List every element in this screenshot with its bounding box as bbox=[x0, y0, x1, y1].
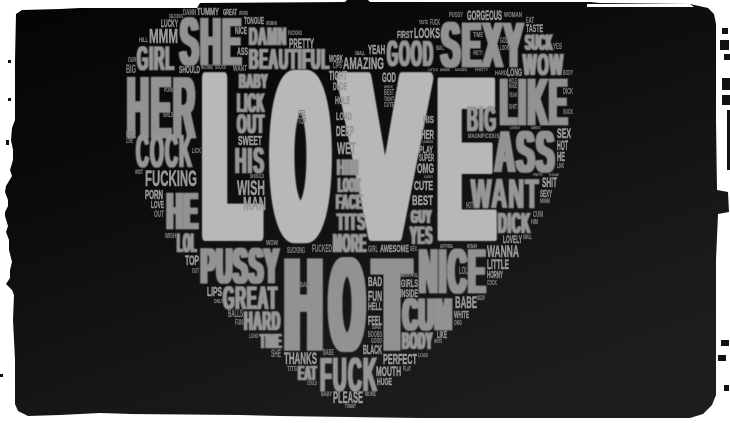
medium words: FUN bbox=[368, 288, 382, 305]
small words: SHIT bbox=[509, 104, 517, 111]
largest words: HE bbox=[167, 183, 199, 241]
largest words: ASS bbox=[495, 120, 556, 185]
small words: WOMAN bbox=[467, 244, 477, 250]
small solid words: TUMMY bbox=[197, 7, 219, 18]
small words: LOAD bbox=[418, 353, 428, 359]
small words: BEAUTIFUL bbox=[400, 273, 418, 279]
small words: DELICIOUS bbox=[169, 14, 183, 20]
word cloud heart: T bbox=[374, 231, 410, 378]
small words: SUCKING bbox=[287, 246, 305, 255]
small words: WOW bbox=[266, 240, 278, 247]
small words: MMM bbox=[540, 199, 550, 205]
small words: LICK bbox=[192, 148, 201, 155]
small solid words: TONGUE bbox=[244, 16, 264, 27]
large words: COCK bbox=[136, 125, 193, 177]
small words: LINK bbox=[557, 163, 564, 170]
small words: FUN bbox=[235, 318, 243, 327]
small solid words: WHITE bbox=[454, 310, 469, 321]
medium words: PRETTY bbox=[289, 35, 314, 51]
large words: LICK bbox=[237, 88, 265, 118]
small solid words: AWESOME bbox=[380, 244, 409, 255]
medium words: DEEP bbox=[336, 123, 354, 140]
small words: HOT bbox=[466, 201, 473, 210]
small words: PRETTY bbox=[533, 172, 543, 177]
small words: COCK bbox=[487, 280, 497, 287]
small words: BOOBS bbox=[368, 330, 382, 339]
largest words bbox=[127, 4, 569, 340]
large words: WANT bbox=[471, 170, 540, 217]
small words: YEAH bbox=[509, 93, 517, 99]
medium words: THANKS bbox=[284, 349, 317, 368]
small words: SUCKED bbox=[455, 67, 467, 72]
small words: GIRL bbox=[368, 244, 378, 254]
small words: TASTE bbox=[419, 20, 428, 26]
large words: HARD bbox=[244, 306, 281, 336]
word cloud heart bbox=[126, 4, 573, 410]
small words: SUCK bbox=[563, 109, 573, 116]
small words: BEST bbox=[384, 88, 394, 97]
large words: BIG bbox=[467, 100, 497, 139]
small words bbox=[126, 8, 573, 410]
small words: HUGE bbox=[509, 84, 517, 90]
medium words: HE bbox=[557, 149, 565, 164]
small solid words: DUDE bbox=[333, 81, 347, 93]
small words: OUT bbox=[192, 268, 199, 275]
small words: WOMAN bbox=[266, 21, 277, 27]
small solid words: TASTE bbox=[526, 23, 543, 35]
small words: LITTLE bbox=[428, 67, 438, 72]
small words: OUT bbox=[154, 209, 164, 219]
small words: MAGNIFICIOUS bbox=[468, 134, 499, 140]
medium words: HER bbox=[421, 127, 434, 142]
large words: BODY bbox=[402, 328, 433, 355]
word cloud heart: E bbox=[438, 31, 494, 287]
large words: HIM bbox=[337, 155, 359, 180]
large words: BEAUTIFUL bbox=[249, 44, 330, 76]
large words: DAMN bbox=[249, 23, 287, 51]
large words: OUT bbox=[237, 109, 265, 139]
medium words: LITTLE bbox=[487, 256, 509, 272]
small words: HARD bbox=[495, 71, 507, 77]
medium words: MAN bbox=[243, 194, 266, 214]
medium words: PLEASE bbox=[333, 388, 363, 407]
small solid words: LOVELY bbox=[503, 234, 522, 246]
small words: HIM bbox=[531, 219, 538, 226]
small words: PRETTY bbox=[473, 51, 483, 57]
largest words: SHE bbox=[180, 4, 243, 80]
small solid words: LOVE bbox=[151, 200, 164, 211]
small words: PLEASE bbox=[549, 172, 559, 177]
small words: SUPER bbox=[372, 325, 381, 331]
small words: WHITE bbox=[384, 84, 393, 89]
small words: FUCKING bbox=[288, 31, 302, 37]
large words: MORE bbox=[333, 228, 367, 258]
small words: DEEP bbox=[477, 296, 485, 302]
small words: PUSSY bbox=[449, 12, 463, 19]
small words: TOP bbox=[298, 116, 306, 126]
small solid words: WORK bbox=[329, 54, 343, 65]
small solid words: GIRLS bbox=[401, 278, 418, 290]
medium words: GOD bbox=[382, 69, 396, 85]
small words: EAT bbox=[526, 16, 534, 25]
small words: BABY bbox=[321, 392, 332, 398]
small words: OMG bbox=[454, 320, 462, 327]
word: LOVE bbox=[201, 30, 494, 287]
medium words: CUTE bbox=[414, 178, 433, 193]
medium words: SHIT bbox=[542, 174, 557, 190]
medium words: LOOKS bbox=[414, 25, 440, 42]
small solid words: SHOULD bbox=[179, 65, 200, 76]
medium words: WANNA bbox=[487, 242, 519, 261]
small words: LOVE bbox=[126, 138, 133, 145]
small words: MORE bbox=[365, 392, 376, 398]
small solid words: HORNY bbox=[487, 270, 503, 281]
small words: HOLE bbox=[509, 78, 517, 85]
word cloud heart: WOW bbox=[523, 47, 564, 82]
word: LOVE: L bbox=[201, 30, 261, 284]
large words: LOL bbox=[177, 228, 197, 258]
text: LIKE bbox=[500, 65, 569, 140]
small words: LUCKY bbox=[424, 174, 433, 179]
small words: SMALL bbox=[355, 51, 365, 57]
large words: HIS bbox=[235, 140, 265, 181]
medium words: GORGEOUS bbox=[467, 7, 502, 23]
small words: HILL bbox=[139, 38, 148, 44]
small words: GOD bbox=[500, 36, 508, 45]
large words: EAT bbox=[298, 363, 317, 385]
small words: LOOKS bbox=[500, 45, 511, 52]
word: LOVE: O bbox=[274, 30, 327, 284]
medium words: BABE bbox=[455, 293, 477, 312]
large words: FACE bbox=[336, 191, 363, 214]
small solid words: HIS bbox=[423, 115, 434, 126]
small words: SHOULD bbox=[250, 174, 264, 180]
small words: MACHINE bbox=[201, 65, 213, 71]
small words: FUCK bbox=[430, 18, 440, 27]
largest words: NICE bbox=[419, 237, 487, 307]
small solid words: NICE bbox=[235, 26, 247, 37]
small words: WISH bbox=[165, 233, 176, 240]
large words: LOOK bbox=[338, 175, 361, 197]
small words: CUM bbox=[533, 210, 543, 219]
large words: SUCK bbox=[525, 30, 553, 55]
medium words: PORN bbox=[145, 187, 163, 202]
small words: PLAY bbox=[403, 366, 411, 373]
small words: BABE bbox=[323, 348, 334, 357]
small words: LONGER bbox=[422, 139, 433, 144]
small solid words: SUPER bbox=[419, 153, 434, 164]
medium words: WET bbox=[337, 139, 356, 158]
small solid words: ASS bbox=[237, 46, 248, 58]
small words: LONG bbox=[249, 334, 258, 340]
small words: LOL bbox=[459, 265, 468, 277]
word: HOT: O bbox=[330, 231, 364, 378]
small words: FACE bbox=[126, 130, 136, 139]
small words: GIRLS bbox=[163, 112, 173, 119]
small solid words: INSIDE bbox=[400, 288, 418, 300]
large words: GOOD bbox=[387, 33, 434, 74]
small words: BALLS bbox=[228, 308, 243, 320]
large words: GREAT bbox=[223, 280, 278, 316]
small words: CUTE bbox=[384, 102, 394, 109]
medium words: SWEET bbox=[238, 133, 262, 148]
small words: SEX bbox=[410, 246, 417, 253]
medium words: MOUTH bbox=[376, 363, 401, 379]
medium words: TIGHT bbox=[329, 68, 347, 83]
medium words: AMAZING bbox=[343, 54, 384, 73]
small words: DRINK bbox=[440, 67, 450, 72]
small solid words: HOLE bbox=[335, 95, 350, 107]
largest words: HER bbox=[127, 58, 197, 157]
small solid words bbox=[151, 7, 552, 388]
small solid words: LUCKY bbox=[161, 18, 178, 30]
large words: TITS bbox=[337, 209, 366, 236]
small words: ANYTHING bbox=[440, 244, 453, 250]
word cloud heart: HOT bbox=[557, 137, 568, 153]
small solid words: PLAY bbox=[419, 145, 433, 156]
small words: TIME bbox=[473, 32, 483, 39]
medium words bbox=[145, 7, 571, 407]
small words: DICK bbox=[563, 87, 573, 96]
medium words: BAD bbox=[368, 274, 382, 289]
small words: SMALL bbox=[523, 235, 532, 241]
word cloud heart: SEXY bbox=[540, 189, 552, 200]
largest words: PUSSY bbox=[201, 238, 280, 294]
small words: DAMN bbox=[183, 8, 196, 17]
small words: LIPS bbox=[333, 61, 342, 70]
small solid words: LOAD bbox=[336, 111, 352, 123]
medium words: WISH bbox=[237, 177, 265, 200]
small words: ONLY bbox=[214, 299, 223, 305]
small words: WANT bbox=[233, 64, 247, 73]
word: LOVE: V bbox=[344, 30, 426, 284]
small solid words: HUGE bbox=[377, 377, 392, 388]
medium words: FEEL bbox=[368, 313, 382, 328]
small words: BAD bbox=[300, 282, 309, 289]
small words: LOVELY bbox=[510, 125, 520, 130]
medium words: YEAH bbox=[368, 42, 385, 57]
small solid words: HELL bbox=[368, 301, 382, 313]
word: HOT: H bbox=[285, 231, 322, 378]
small words: COULD bbox=[307, 381, 317, 387]
small solid words: LIKE bbox=[437, 330, 447, 341]
large words: TIME bbox=[260, 331, 282, 353]
small words: WIST bbox=[135, 170, 143, 176]
medium words: BEST bbox=[412, 192, 433, 208]
medium words: LIPS bbox=[207, 284, 222, 299]
medium words: MMM bbox=[149, 26, 178, 48]
medium words: SEX bbox=[557, 125, 571, 141]
small words: TITS bbox=[287, 366, 297, 373]
medium words: BLACK bbox=[363, 342, 382, 357]
large words: YES bbox=[410, 222, 433, 250]
small words: FUCKED bbox=[312, 243, 332, 255]
large words: GUY bbox=[411, 207, 432, 227]
largest words: CUM bbox=[403, 289, 453, 340]
small words: TUMMY bbox=[345, 404, 356, 410]
small words: WHITE bbox=[434, 339, 442, 345]
small words: SMALL bbox=[436, 46, 444, 52]
small words: PRETTY bbox=[475, 67, 488, 72]
small words: PORN bbox=[164, 88, 173, 94]
small words: BODY bbox=[563, 70, 573, 77]
small words: WOMAN bbox=[504, 12, 522, 19]
small words: TIGHT bbox=[384, 97, 394, 103]
small words: BIG bbox=[126, 62, 136, 76]
large words: DICK bbox=[498, 208, 531, 240]
large words: FUCK bbox=[320, 349, 378, 402]
largest words: SEXY bbox=[441, 9, 525, 81]
large words: GIRL bbox=[137, 40, 175, 78]
small words: SUCKS bbox=[215, 65, 226, 71]
small words: WORD bbox=[239, 11, 248, 17]
small words: OUR bbox=[128, 57, 136, 64]
small solid words: LONG bbox=[507, 67, 522, 79]
small words: SHE bbox=[271, 348, 281, 360]
small solid words: GREAT bbox=[223, 8, 237, 17]
medium words: TOP bbox=[185, 252, 199, 268]
small words: FEEL bbox=[298, 109, 306, 118]
small words: YES bbox=[553, 42, 562, 51]
small solid words: FIRST bbox=[397, 30, 413, 41]
large words: BABY bbox=[239, 71, 268, 93]
medium words: PERFECT bbox=[383, 351, 417, 368]
small words: SWEET bbox=[531, 125, 541, 130]
medium words: OMG bbox=[417, 160, 434, 176]
medium words: FUCKING bbox=[145, 166, 197, 191]
large words bbox=[136, 23, 564, 402]
small words: GOOD bbox=[371, 338, 382, 345]
